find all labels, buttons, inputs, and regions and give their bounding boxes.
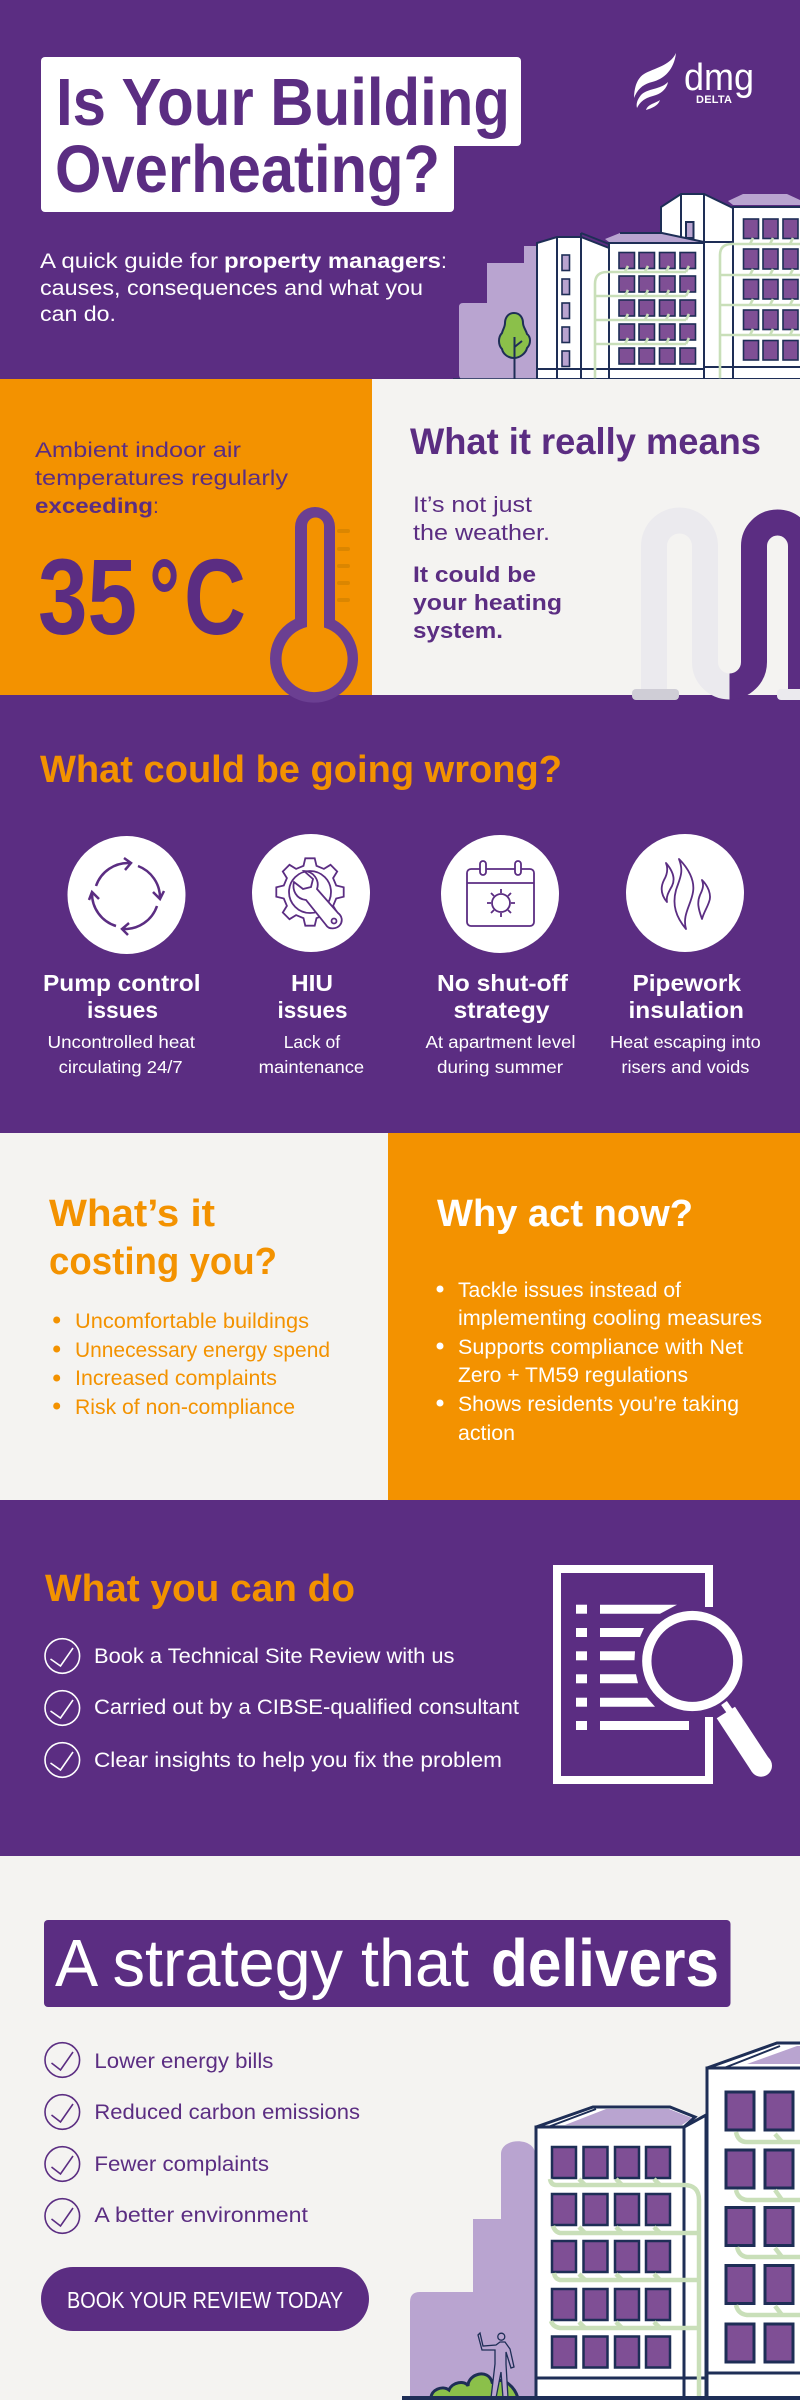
panel: what it really means — [372, 379, 800, 696]
thermometer scale ticks — [337, 529, 350, 602]
intro text — [40, 250, 447, 326]
bullet list: Risk of non-compliance — [75, 1396, 295, 1419]
benefits checklist: A better environment — [94, 2204, 308, 2227]
big temperature: 35 — [38, 536, 137, 657]
bullet list: Uncomfortable buildings — [75, 1310, 309, 1333]
body text: your heating — [413, 590, 562, 615]
building front left — [537, 233, 704, 379]
issue labels: pipework insulation: insulation — [628, 997, 744, 1023]
issue labels: HIU: Lack of — [284, 1032, 340, 1052]
issue labels: shut-off strategy: strategy — [454, 997, 550, 1023]
checklist: Carried out by a CIBSE-qualified consultant — [94, 1696, 519, 1719]
issue labels: HIU — [259, 970, 364, 1077]
button: book your review: BOOK YOUR REVIEW TODAY — [67, 2287, 343, 2313]
logo: dmg delta: dmg — [684, 57, 754, 99]
checklist — [45, 1639, 519, 1777]
button: book your review — [41, 2267, 369, 2331]
icon: bush — [431, 2374, 518, 2398]
panel: what's it costing you — [0, 1133, 388, 1500]
icon: document and magnifying glass — [557, 1569, 772, 1780]
big temperature: ° — [149, 536, 180, 657]
heading — [49, 1193, 277, 1283]
heading banner — [44, 1920, 730, 2007]
heading: costing you? — [49, 1241, 277, 1283]
rear block — [661, 194, 733, 300]
heading: What you can do — [45, 1568, 355, 1610]
checklist: Clear insights to help you fix the problem — [94, 1749, 502, 1772]
issue labels: shut-off strategy: during summer — [437, 1057, 563, 1077]
bullet list: implementing cooling measures — [458, 1307, 762, 1330]
panel: header — [0, 0, 800, 382]
issue labels: pump control: Pump control — [43, 970, 200, 996]
bullet list: Increased complaints — [75, 1367, 277, 1390]
exceeding text: temperatures regularly — [35, 467, 289, 490]
exceeding text — [35, 439, 289, 518]
panel: a strategy that delivers — [0, 1856, 800, 2400]
heading: What could be going wrong? — [40, 749, 562, 791]
intro text: property managers — [224, 250, 441, 273]
climbing vines — [550, 2132, 800, 2400]
left building windows — [552, 2147, 670, 2368]
bullet list — [53, 1310, 330, 1419]
intro text: : — [441, 250, 447, 273]
heading: What it really means — [410, 421, 761, 462]
issue labels: pipework insulation: Heat escaping into — [610, 1032, 761, 1052]
intro text: can do. — [40, 303, 116, 326]
bullet list: action — [458, 1422, 515, 1445]
issue labels: pump control: circulating 24/7 — [59, 1057, 183, 1077]
issue labels: HIU: issues — [278, 997, 348, 1023]
icon: circular arrows — [68, 836, 186, 954]
illustration: buildings and tree — [453, 194, 800, 382]
intro text: causes, consequences and what you — [40, 277, 423, 300]
heading banner: A strategy that — [55, 1926, 469, 2001]
title — [41, 57, 521, 212]
left building — [536, 2107, 706, 2398]
title: Is Your Building — [56, 65, 510, 140]
issue labels: shut-off strategy: At apartment level — [426, 1032, 576, 1052]
issue labels: pipework insulation — [610, 970, 761, 1077]
icon: heat waves — [626, 834, 744, 952]
exceeding text: Ambient indoor air — [35, 439, 241, 462]
bullet list: Shows residents you’re taking — [458, 1393, 739, 1416]
icon: gear and wrench — [252, 834, 370, 952]
right building windows — [726, 2092, 793, 2362]
intro text: A quick guide for — [40, 250, 218, 273]
issue labels: pump control: issues — [87, 997, 158, 1023]
icon: thermometer — [270, 507, 358, 703]
panel: 35 degrees orange — [0, 379, 372, 696]
issue labels: HIU: HIU — [291, 970, 333, 996]
logo: dmg delta: DELTA — [696, 94, 732, 106]
panel: what could be going wrong — [0, 695, 800, 1133]
benefits checklist: Lower energy bills — [94, 2050, 273, 2073]
issue labels: pump control: Uncontrolled heat — [48, 1032, 195, 1052]
panel: why act now — [388, 1133, 800, 1500]
building front right — [704, 207, 800, 379]
illustration: buildings, person and bush — [402, 2043, 800, 2400]
right building — [707, 2043, 800, 2398]
logo: dmg delta — [634, 53, 754, 110]
panel: what you can do — [0, 1500, 800, 1856]
bullet list: Tackle issues instead of — [458, 1279, 681, 1302]
bullet list: Zero + TM59 regulations — [458, 1364, 688, 1387]
body text: It’s not just — [413, 492, 532, 517]
heading: What’s it — [49, 1193, 215, 1235]
bullet list: Supports compliance with Net — [458, 1336, 743, 1359]
heading banner: delivers — [491, 1926, 719, 2001]
checklist: Book a Technical Site Review with us — [94, 1645, 454, 1668]
issue labels: shut-off strategy — [426, 970, 576, 1077]
exceeding text: : — [153, 495, 159, 518]
body text: the weather. — [413, 520, 550, 545]
big temperature: C — [184, 536, 246, 657]
body text: system. — [413, 618, 503, 643]
bullet list: Unnecessary energy spend — [75, 1339, 330, 1362]
icon: pipes — [632, 521, 800, 700]
body text: It could be — [413, 562, 536, 587]
issue labels: pipework insulation: Pipework — [632, 970, 741, 996]
benefits checklist — [45, 2043, 360, 2233]
body text — [413, 492, 562, 643]
climbing vines — [595, 238, 800, 382]
bullet list — [436, 1279, 762, 1445]
benefits checklist: Fewer complaints — [94, 2153, 269, 2176]
heading: Why act now? — [437, 1193, 693, 1235]
big temperature — [38, 536, 246, 657]
icon: tree — [499, 313, 530, 380]
icon: calendar with sun — [441, 835, 559, 953]
exceeding text: exceeding — [35, 495, 153, 518]
issue labels: pump control — [43, 970, 200, 1077]
icon: person — [478, 2333, 514, 2398]
benefits checklist: Reduced carbon emissions — [94, 2101, 360, 2124]
issue labels: pipework insulation: risers and voids — [621, 1057, 750, 1077]
issue labels: shut-off strategy: No shut-off — [437, 970, 568, 996]
title: Overheating? — [55, 132, 440, 207]
issue labels: HIU: maintenance — [259, 1057, 364, 1077]
